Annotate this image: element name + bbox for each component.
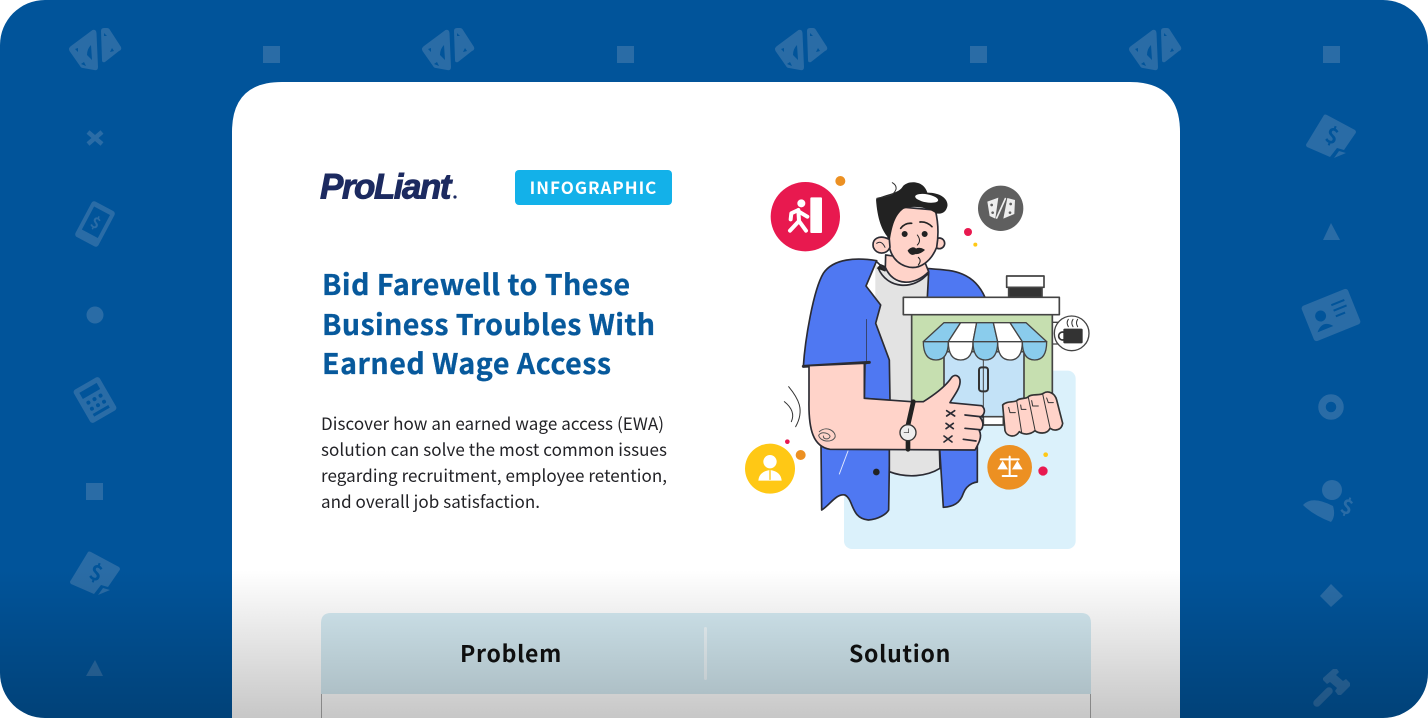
icon: id card	[1301, 288, 1361, 342]
heading: Problem: Problem	[460, 635, 562, 669]
logo: ProLiant	[320, 172, 457, 200]
illustration: man carrying a shop	[745, 176, 1089, 549]
decorative dots	[785, 176, 1048, 476]
body text: and overall job satisfaction.	[321, 488, 540, 513]
table column divider	[704, 627, 707, 680]
arm and thumb	[809, 363, 984, 450]
icon: person with dollar	[1303, 480, 1358, 522]
panel: table header	[321, 613, 1091, 694]
icon: money note left	[70, 552, 120, 595]
hair	[876, 182, 948, 239]
icon: dot	[86, 306, 104, 324]
icon: cards in grey circle	[978, 186, 1023, 231]
title: Bid Farewell to These	[322, 263, 630, 304]
icon: money note right	[1306, 114, 1356, 158]
icon: gavel	[1317, 669, 1350, 703]
icon: person with dollar: $	[1337, 490, 1358, 521]
icon: phone with dollar: $	[87, 211, 105, 234]
panel: white card	[232, 82, 1180, 718]
icon: money note left: $	[85, 556, 107, 589]
body text: Discover how an earned wage access (EWA)	[321, 410, 664, 435]
face details	[901, 222, 932, 265]
icon: triangle right	[1323, 223, 1340, 240]
awning	[923, 323, 1047, 360]
jacket lower	[821, 443, 977, 520]
coffee sign	[1053, 316, 1089, 351]
icon: ring	[1322, 398, 1340, 416]
icon: squares top row	[263, 46, 1340, 63]
heading: Solution: Solution	[849, 635, 951, 669]
shirt	[875, 265, 940, 476]
icon: cross	[88, 132, 102, 144]
jacket crease	[839, 451, 848, 474]
icon: scales in orange circle	[987, 445, 1032, 490]
icon: cards pattern, top row and left column	[69, 28, 1181, 70]
jacket upper	[803, 259, 985, 401]
icon: phone with dollar	[74, 200, 116, 248]
bottom fade shadow	[0, 570, 1428, 718]
collar shadow	[877, 264, 929, 276]
shop	[903, 276, 1059, 425]
right hand fingers	[1003, 392, 1063, 436]
table body	[322, 694, 1090, 718]
watch	[900, 402, 916, 449]
logo: ProLiant: ProLiant	[320, 168, 453, 206]
body text: solution can solve the most common issues	[321, 436, 667, 461]
jacket button	[873, 469, 880, 475]
head	[873, 207, 945, 282]
title: Business Troubles With	[322, 303, 655, 344]
icon: calculator	[73, 376, 117, 424]
body text: regarding recruitment, employee retention,	[321, 462, 667, 487]
light blue backdrop	[844, 371, 1076, 549]
icon: exit in red circle	[771, 182, 840, 251]
motion lines	[784, 387, 800, 427]
icon: money note right: $	[1321, 119, 1343, 152]
icon: person in yellow circle	[745, 444, 795, 494]
icon: triangle left	[86, 660, 103, 676]
badge: infographic	[515, 170, 672, 205]
title: Earned Wage Access	[322, 342, 611, 383]
icon: square	[86, 483, 103, 500]
icon: diamond	[1320, 584, 1343, 607]
badge: infographic: INFOGRAPHIC	[530, 174, 657, 199]
